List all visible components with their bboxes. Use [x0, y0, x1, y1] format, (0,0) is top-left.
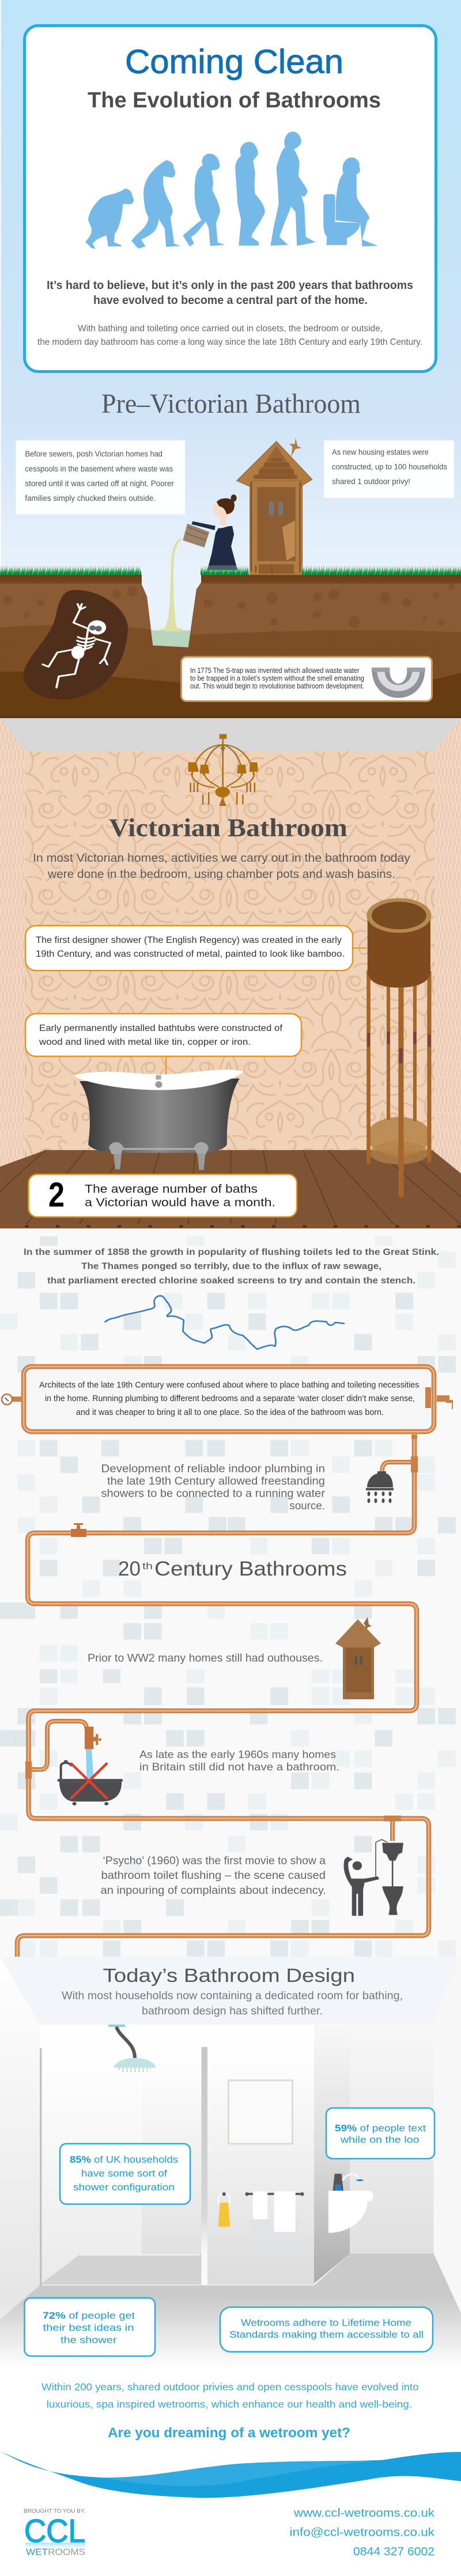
callout: privy: constructed, up to 100 households [332, 462, 447, 471]
outhouses text: Prior to WW2 many homes still had outhouses. [88, 1652, 323, 1665]
footer logo: WETROOMS [26, 2548, 85, 2558]
blue wave [0, 2451, 461, 2498]
stat: 72 percent [24, 2298, 155, 2356]
stat: 59 percent: 59% of people text [335, 2123, 426, 2134]
heading: 20th Century Bathrooms: Century Bathrooms [154, 1558, 347, 1580]
Today intro text: With most households now containing a dedicated room for bathing, [62, 1990, 403, 2002]
icon: towel rail [245, 2191, 304, 2255]
Today intro text [62, 1990, 403, 2017]
callout: S-trap: to be trapped in a toilet’s system without the smell emanating [190, 675, 364, 683]
woman pouring bucket [183, 494, 237, 570]
footer contact details [289, 2507, 435, 2558]
mirror [228, 2080, 293, 2144]
heading: Pre-Victorian Bathroom: Pre–Victorian Bathroom [101, 389, 361, 419]
panel: underground scene [0, 437, 461, 718]
icon: River Thames [105, 1296, 345, 1349]
number 2: 2 [48, 1175, 65, 1214]
callout: cesspools: stored until it was carted off at night. Poorer [25, 479, 174, 488]
stat: 85 percent: have some sort of [81, 2168, 167, 2179]
left side wall [0, 1957, 40, 2319]
stat: Lifetime Home Standards: Standards making them accessible to all [229, 2329, 424, 2340]
1960s text: As late as the early 1960s many homes [139, 1748, 336, 1760]
stat: 85 percent: 85% of UK households [70, 2154, 178, 2165]
icon: no bathroom tub [57, 1726, 123, 1805]
back wall [40, 2025, 314, 2285]
callout: two baths a month [29, 1174, 297, 1217]
stat: 72 percent: the shower [61, 2334, 117, 2345]
icon: towel ring [218, 2192, 230, 2227]
bath statistic text: The average number of baths [85, 1183, 258, 1196]
callout: early bathtubs [25, 1014, 301, 1056]
stat: 72 percent: 72% of people get [43, 2310, 135, 2321]
callout: cesspools: cesspools in the basement where waste was [25, 464, 173, 473]
shower branch [382, 1462, 414, 1471]
outhouse illustration [237, 437, 312, 575]
closing text: luxurious, spa inspired wetrooms, which enhance our health and well-being. [47, 2398, 412, 2410]
stat: 59 percent: while on the loo [340, 2134, 420, 2145]
closing text [41, 2381, 418, 2410]
shower development text: the late 19th Century allowed freestanding [107, 1475, 325, 1487]
title: Coming Clean [125, 43, 343, 81]
callout: privy: shared 1 outdoor privy! [332, 477, 410, 486]
icon: bamboo shower [366, 898, 431, 1197]
1960s text: in Britain still did not have a bathroom. [139, 1760, 339, 1773]
Victorian intro text: In most Victorian homes, activities we carry out in the bathroom today [33, 851, 411, 865]
panel: copper pipe run [17, 1435, 429, 1957]
intro statement: It’s hard to believe, but it’s only in the past 200 years that bathrooms [47, 279, 413, 292]
shower development text: showers to be connected to a running water [101, 1488, 326, 1500]
intro detail text: the modern day bathroom has come a long way since the late 18th Century and early 19th Century. [37, 337, 422, 347]
bath statistic text: a Victorian would have a month. [85, 1196, 275, 1209]
stat: Lifetime Home Standards [220, 2307, 433, 2352]
stat: 59 percent [326, 2108, 434, 2159]
buried skeleton [24, 590, 128, 699]
shower development text: Development of reliable indoor plumbing in [101, 1463, 325, 1475]
icon: pressure gauge [2, 1394, 22, 1405]
Today intro text: bathroom design has shifted further. [142, 2006, 323, 2017]
Great Stink text [24, 1247, 439, 1285]
footer contact details: www.ccl-wetrooms.co.uk [293, 2507, 435, 2520]
tap branch [29, 1721, 86, 1770]
icon: rain shower head [108, 2025, 156, 2073]
callout: designer shower: 19th Century, and was constructed of metal, painted to look like bamboo. [36, 949, 345, 959]
callout: privy: As new housing estates were [332, 447, 429, 456]
sky background [0, 0, 461, 576]
callout: designer shower: The first designer shower (The English Regency) was created in the early [36, 935, 342, 945]
panel: intro card [24, 25, 436, 372]
heading: Today's Bathroom Design: Today’s Bathroom Design [103, 1965, 355, 1986]
pillar side [314, 2025, 350, 2284]
footer logo: CCL [24, 2513, 85, 2550]
icon: man flushing toilet [343, 1840, 403, 1916]
callout: S-trap: In 1775 The S-trap was invented which allowed waste water [190, 667, 360, 675]
shower development text: source. [289, 1500, 325, 1512]
floor [0, 1150, 461, 1229]
call to action: Are you dreaming of a wetroom yet? [108, 2425, 350, 2441]
callout: early bathtubs: wood and lined with metal like tin, copper or iron. [39, 1037, 251, 1047]
intro detail text: With bathing and toileting once carried out in closets, the bedroom or outside, [78, 324, 383, 334]
cesspit [142, 538, 201, 647]
icon: pipe valve [71, 1523, 86, 1537]
callout: early bathtubs: Early permanently installed bathtubs were constructed of [39, 1023, 283, 1033]
glass edges [40, 2048, 41, 2286]
right wall [350, 2025, 433, 2254]
heading: 20th Century Bathrooms: th [142, 1561, 153, 1572]
icon: small outhouse [335, 1617, 381, 1699]
1960s text [139, 1748, 339, 1773]
intro statement [47, 279, 413, 307]
intro statement: have evolved to become a central part of the home. [93, 294, 368, 307]
heading: Victorian Bathroom: Victorian Bathroom [109, 814, 347, 842]
Psycho text: an inpouring of complaints about indecency. [100, 1885, 326, 1897]
ceiling [0, 1957, 459, 2025]
stat: 85 percent [60, 2144, 190, 2204]
shower development text [101, 1463, 326, 1512]
panel: architects callout: and it was cheaper to bring it all to one place. So the idea of the bathroom was born. [76, 1407, 384, 1417]
callout: S-trap [181, 657, 432, 701]
Psycho text [100, 1855, 326, 1897]
grass strips [0, 565, 461, 575]
intro detail text [37, 324, 422, 347]
Victorian intro text: were done in the bedroom, using chamber pots and wash basins. [47, 867, 395, 881]
icon: chandelier [188, 734, 258, 806]
Great Stink text: that parliament erected chlorine soaked screens to try and contain the stench. [47, 1276, 415, 1285]
floor [0, 2254, 461, 2368]
footer contact details: info@ccl-wetrooms.co.uk [289, 2526, 435, 2539]
tap body [85, 1726, 101, 1749]
icon: evolution silhouettes [85, 132, 378, 249]
ceiling [0, 718, 461, 751]
panel: architects callout: in the home. Running plumbing to different bedrooms and a separate ‘water closet’ didn’t make sense, [45, 1394, 415, 1403]
callout: cesspools: families simply chucked theirs outside. [25, 493, 156, 503]
icon: shower head [366, 1471, 394, 1503]
Great Stink text: The Thames ponged so terribly, due to the influx of raw sewage, [81, 1262, 381, 1271]
heading: 20th Century Bathrooms: 20 [118, 1558, 141, 1580]
callout: privy [324, 440, 454, 498]
Victorian intro text [33, 851, 411, 881]
footer logo: BROUGHT TO YOU BY: [24, 2508, 85, 2514]
closing text: Within 200 years, shared outdoor privies and open cesspools have evolved into [41, 2381, 418, 2392]
panel: modern room [0, 1957, 461, 2368]
callout: designer shower [25, 926, 353, 971]
stat: 72 percent: their best ideas in [43, 2322, 134, 2333]
Psycho text: ‘Psycho’ (1960) was the first movie to show a [103, 1855, 326, 1867]
icon: sink [328, 2174, 373, 2233]
panel: architects callout [2, 1367, 453, 1432]
panel: Victorian room wall [0, 717, 461, 1230]
panel: architects callout: Architects of the late 19th Century were confused about where to place bathing and toileting necessities [39, 1380, 420, 1390]
connector lines [166, 948, 366, 1075]
bath statistic text [85, 1183, 275, 1209]
icon: side tap [425, 1387, 453, 1409]
subtitle: The Evolution of Bathrooms [88, 89, 381, 113]
icon: roll top bath [74, 1070, 244, 1170]
callout: cesspools [16, 440, 185, 515]
Great Stink text: In the summer of 1858 the growth in popularity of flushing toilets led to the Great Stink. [24, 1247, 439, 1257]
callout: cesspools: Before sewers, posh Victorian homes had [25, 449, 163, 458]
toilet branch [390, 1818, 395, 1841]
Psycho text: bathroom toilet flushing – the scene caused [101, 1870, 326, 1882]
stat: Lifetime Home Standards: Wetrooms adhere to Lifetime Home [241, 2317, 411, 2328]
panel: tiled wall background [0, 1228, 461, 1957]
callout: S-trap: out. This would begin to revolutionise bathroom development. [190, 682, 364, 690]
footer contact details: 0844 327 6002 [353, 2545, 434, 2558]
stat: 85 percent: shower configuration [73, 2182, 175, 2193]
icon: S-trap pipe [372, 668, 425, 691]
